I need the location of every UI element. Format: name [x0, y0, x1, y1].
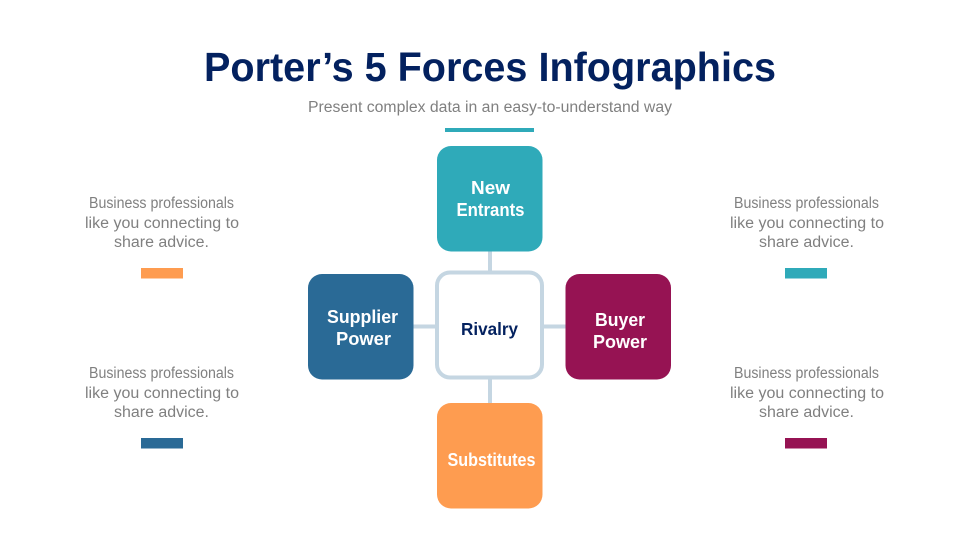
box: supplier power [308, 274, 414, 380]
box: substitutes: Substitutes [448, 449, 536, 470]
text block: top left [85, 195, 239, 251]
text block: top right: Business professionals [734, 195, 879, 212]
title accent bar [445, 128, 534, 132]
box: buyer power: Buyer [595, 309, 645, 330]
connector: top [488, 250, 492, 272]
box: buyer power: Power [593, 331, 647, 352]
text block: top right: share advice. [759, 234, 854, 251]
subtitle: Present complex data in an easy-to-understand way [308, 99, 672, 116]
text block: top left: share advice. [114, 234, 209, 251]
box: new entrants [437, 146, 542, 252]
box: rivalry: Rivalry [461, 319, 518, 339]
text block: bottom left: share advice. [114, 404, 209, 421]
accent bar: bottom right [785, 438, 827, 448]
text block: bottom left: like you connecting to [85, 385, 239, 402]
connector: left [413, 324, 437, 328]
text block: top left: like you connecting to [85, 215, 239, 232]
text block: bottom right: share advice. [759, 404, 854, 421]
box: new entrants: Entrants [456, 199, 524, 220]
accent bar: top right [785, 268, 827, 278]
accent bar: top left [141, 268, 183, 278]
connector: right [543, 324, 566, 328]
box: rivalry [437, 272, 542, 378]
box: buyer power [566, 274, 671, 380]
text block: bottom right [730, 365, 884, 421]
box: new entrants: New [471, 177, 511, 198]
box: supplier power: Supplier [327, 306, 398, 327]
accent bar: bottom left [141, 438, 183, 448]
text block: bottom right: Business professionals [734, 365, 879, 382]
text block: top left: Business professionals [89, 195, 234, 212]
title: Porter’s 5 Forces Infographics [204, 44, 776, 90]
text block: top right: like you connecting to [730, 215, 884, 232]
text block: bottom left: Business professionals [89, 365, 234, 382]
box: substitutes [437, 403, 542, 508]
connector: bottom [488, 378, 492, 404]
diagram: five forces [308, 146, 671, 508]
box: supplier power: Power [336, 328, 391, 349]
text block: bottom right: like you connecting to [730, 385, 884, 402]
text block: bottom left [85, 365, 239, 421]
text block: top right [730, 195, 884, 251]
